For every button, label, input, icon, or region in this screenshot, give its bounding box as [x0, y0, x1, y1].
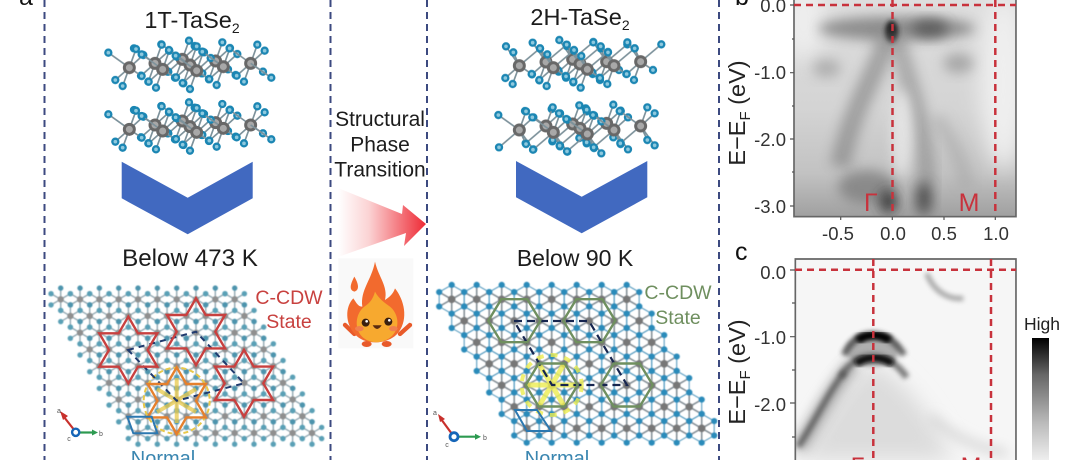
legend: colour bar	[1024, 314, 1060, 460]
text: Structural Phase Transition: Structural	[335, 108, 425, 131]
panel: 1T-TaSe2	[48, 7, 324, 460]
chart: 1T lattice top view	[48, 285, 324, 447]
gamma and M labels clipped	[852, 458, 980, 460]
x tick labels	[822, 223, 1009, 244]
label: C-CDW State (red): State	[266, 311, 312, 333]
star: red David star 2	[167, 298, 225, 365]
label: C-CDW State (red): C-CDW	[255, 287, 323, 309]
panel label c: c	[735, 238, 748, 266]
text: Below 473 K: Below 473 K	[122, 245, 258, 272]
chart: 2H lattice top view	[436, 282, 717, 446]
unit cell rhombus	[515, 410, 551, 431]
panel: phase transition	[334, 108, 426, 348]
label: C-CDW State (green): C-CDW	[644, 282, 712, 304]
x tick labels: 0.5	[931, 223, 957, 244]
legend: colour bar: High	[1024, 314, 1060, 334]
text: Structural Phase Transition: Phase	[350, 134, 410, 156]
x tick labels: 0.0	[880, 223, 906, 244]
icon: axes a b c: b	[99, 431, 103, 438]
arrow: gradient red arrow	[338, 188, 426, 257]
circle: yellow cluster highlight	[144, 368, 210, 434]
text: Structural Phase Transition: Transition	[334, 158, 426, 182]
axis ticks	[790, 5, 995, 220]
unit cell rhombus	[127, 417, 157, 433]
icon: 2H crystal side view	[495, 37, 664, 156]
panel border: right dashed line	[718, 0, 720, 460]
y axis title: E−E	[724, 380, 750, 425]
panel border: left dashed line	[44, 0, 46, 460]
M and gamma labels: M	[959, 189, 979, 217]
icon: blue chevron	[122, 162, 253, 234]
y tick labels: -3.0	[754, 196, 786, 217]
hexagon 2	[563, 299, 615, 342]
icon: axes a b c: c	[445, 442, 449, 449]
heading: 1T-TaSe2: 2	[232, 20, 240, 36]
icon: axes a b c: c	[67, 436, 71, 443]
icon: axes a b c	[433, 410, 487, 449]
icon: blue chevron	[516, 161, 647, 233]
y tick labels: -1.0	[754, 62, 786, 83]
star: orange David star	[148, 367, 206, 434]
icon: cute flame	[338, 258, 413, 348]
y axis title: F	[737, 111, 754, 121]
y axis title: (eV)	[724, 319, 750, 370]
text: Structural Phase Transition	[334, 108, 426, 182]
dashed supercell outline	[128, 332, 244, 401]
guide lines: red dashes	[794, 0, 1016, 216]
icon: axes a b c	[57, 408, 103, 443]
y tick labels	[754, 0, 786, 217]
chart: ARPES intensity map b	[783, 0, 1027, 217]
chart: ARPES intensity map c	[795, 259, 1016, 460]
M and gamma labels: Γ	[864, 189, 878, 217]
label: C-CDW State (red)	[255, 287, 323, 333]
heading: 1T-TaSe2: 1T-TaSe	[144, 7, 232, 33]
panel c: ARPES of 2H	[724, 238, 1060, 460]
x tick labels: -0.5	[822, 223, 854, 244]
panel border: dashed line between arrow and 2H panel	[426, 0, 428, 460]
icon: axes a b c: a	[57, 408, 61, 415]
panel: 2H-TaSe2	[433, 4, 717, 460]
hexagon 1	[488, 299, 540, 342]
heading: 2H-TaSe2: 2	[622, 17, 630, 33]
icon: axes a b c: a	[433, 410, 437, 417]
panel b: ARPES of 1T	[724, 0, 1027, 244]
y tick labels	[754, 262, 786, 415]
y axis title: (eV)	[724, 60, 750, 111]
heading: 2H-TaSe2: 2H-TaSe	[530, 4, 622, 30]
y tick labels: -2.0	[754, 129, 786, 150]
y tick labels: -1.0	[754, 327, 786, 348]
hexagon 4	[601, 364, 653, 406]
y tick labels: 0.0	[760, 262, 786, 283]
star: red David star 3	[215, 350, 273, 417]
y axis title: E−E	[724, 121, 750, 166]
panel border: dashed line between 1T panel and arrow	[330, 0, 332, 460]
y axis title: F	[737, 370, 754, 380]
icon: 1T crystal side view	[105, 38, 274, 154]
star: red David star 1	[99, 317, 157, 383]
icon: axes a b c: b	[483, 435, 487, 442]
M and gamma labels	[866, 194, 978, 211]
label: C-CDW State (green)	[644, 282, 712, 329]
hexagon 3	[526, 364, 578, 406]
petals: yellow cluster highlight	[522, 355, 582, 415]
text: Below 90 K: Below 90 K	[517, 245, 634, 271]
axis ticks	[790, 270, 795, 437]
dashed supercell outline	[514, 321, 627, 385]
x tick labels: 1.0	[983, 223, 1009, 244]
y tick labels: -2.0	[754, 394, 786, 415]
label: C-CDW State (green): State	[655, 307, 701, 329]
guide lines: red dashes	[795, 259, 1016, 460]
